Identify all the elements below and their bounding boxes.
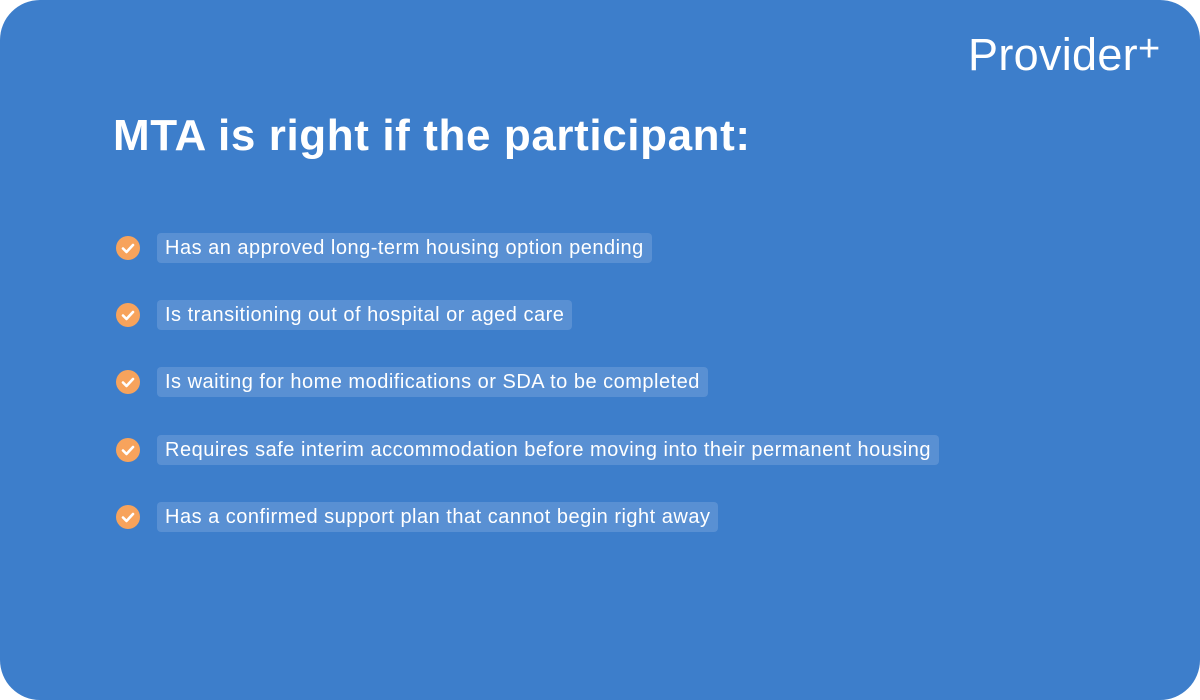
list item 1 bbox=[116, 233, 652, 263]
icon: check bbox=[116, 303, 140, 327]
icon: check bbox=[116, 236, 140, 260]
text: Has a confirmed support plan that cannot begin right away bbox=[165, 506, 710, 528]
list item 4 bbox=[116, 435, 939, 465]
icon: check bbox=[116, 505, 140, 529]
text: Requires safe interim accommodation before moving into their permanent housing bbox=[165, 439, 931, 461]
list item 2 bbox=[116, 300, 572, 330]
logo: + bbox=[1138, 28, 1160, 70]
text: Is waiting for home modifications or SDA to be completed bbox=[165, 371, 700, 393]
list item 5 bbox=[116, 502, 718, 532]
icon: check bbox=[116, 438, 140, 462]
list item 3 bbox=[116, 367, 708, 397]
text: Is transitioning out of hospital or aged care bbox=[165, 304, 564, 326]
icon: check bbox=[116, 370, 140, 394]
text: Has an approved long-term housing option pending bbox=[165, 237, 644, 259]
title: MTA is right if the participant: bbox=[113, 111, 751, 160]
logo: Provider bbox=[968, 29, 1138, 80]
